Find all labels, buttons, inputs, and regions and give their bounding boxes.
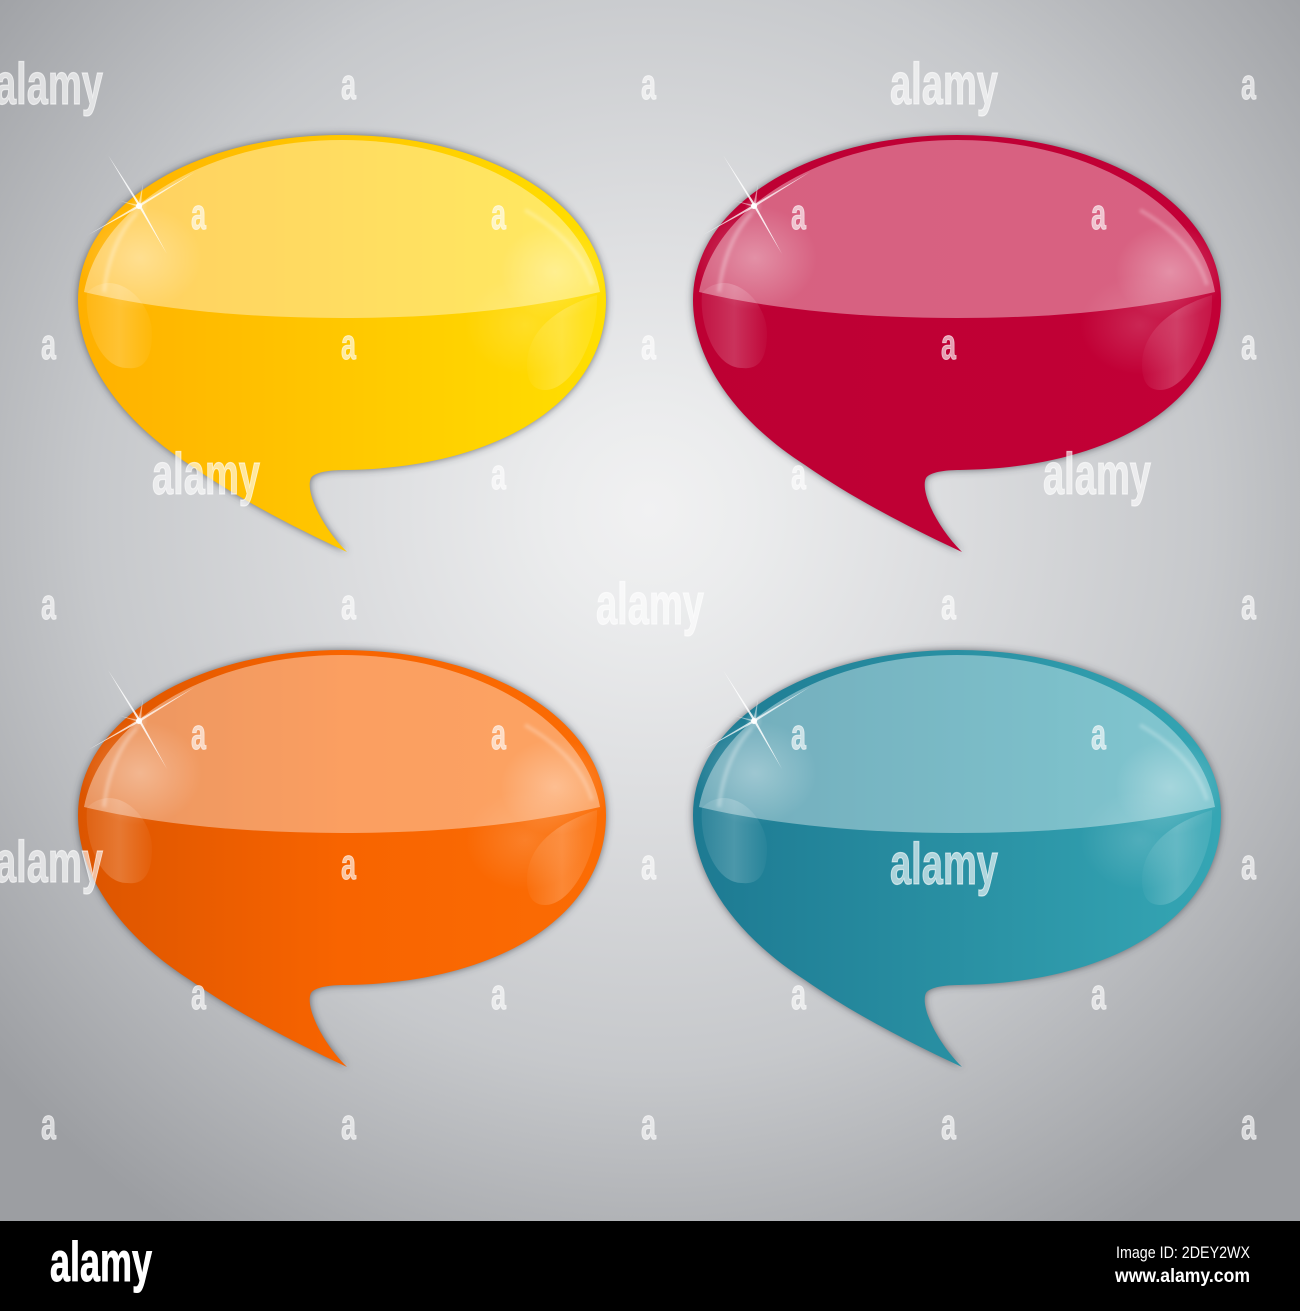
watermark wordmarks: alamy	[152, 442, 260, 507]
watermark small letters: a	[1091, 970, 1106, 1019]
watermark small letters: a	[491, 710, 506, 759]
watermark small letters: a	[341, 580, 356, 629]
watermark small letters: a	[41, 580, 56, 629]
watermark small letters: a	[641, 320, 656, 369]
watermark small letters: a	[191, 970, 206, 1019]
footer band	[0, 1221, 1300, 1311]
watermark small letters: a	[791, 190, 806, 239]
watermark small letters: a	[341, 320, 356, 369]
watermark small letters: a	[491, 970, 506, 1019]
watermark wordmarks: alamy	[1043, 442, 1151, 507]
watermark small letters: a	[791, 450, 806, 499]
watermark small letters: a	[491, 450, 506, 499]
watermark small letters: a	[641, 60, 656, 109]
watermark small letters: a	[941, 580, 956, 629]
watermark small letters: a	[641, 1100, 656, 1149]
watermark small letters: a	[341, 60, 356, 109]
watermark small letters: a	[1241, 60, 1256, 109]
watermark wordmarks	[0, 52, 1151, 897]
footer logo: alamy	[50, 1230, 152, 1293]
watermark small letters: a	[491, 190, 506, 239]
image id: Image ID: 2DEY2WX	[1116, 1243, 1250, 1262]
watermark small letters: a	[791, 710, 806, 759]
watermark small letters: a	[41, 1100, 56, 1149]
watermark wordmarks: alamy	[890, 52, 998, 117]
watermark small letters: a	[1241, 1100, 1256, 1149]
watermark small letters	[41, 60, 1256, 1149]
watermark small letters: a	[1241, 320, 1256, 369]
watermark small letters: a	[641, 840, 656, 889]
watermark small letters: a	[341, 840, 356, 889]
watermark small letters: a	[41, 320, 56, 369]
watermark small letters: a	[191, 190, 206, 239]
watermark small letters: a	[191, 710, 206, 759]
watermark small letters: a	[941, 1100, 956, 1149]
website: www.alamy.com	[1114, 1266, 1250, 1287]
speech bubble: teal	[693, 650, 1225, 1067]
speech bubble: orange	[78, 650, 610, 1067]
watermark small letters: a	[341, 1100, 356, 1149]
watermark wordmarks: alamy	[890, 832, 998, 897]
watermark small letters: a	[791, 970, 806, 1019]
watermark wordmarks: alamy	[596, 572, 704, 637]
watermark small letters: a	[1241, 580, 1256, 629]
watermark small letters: a	[1091, 190, 1106, 239]
speech bubble: crimson	[693, 135, 1225, 552]
speech bubble: yellow	[78, 135, 610, 552]
watermark small letters: a	[1091, 710, 1106, 759]
watermark small letters: a	[1241, 840, 1256, 889]
watermark small letters: a	[941, 320, 956, 369]
